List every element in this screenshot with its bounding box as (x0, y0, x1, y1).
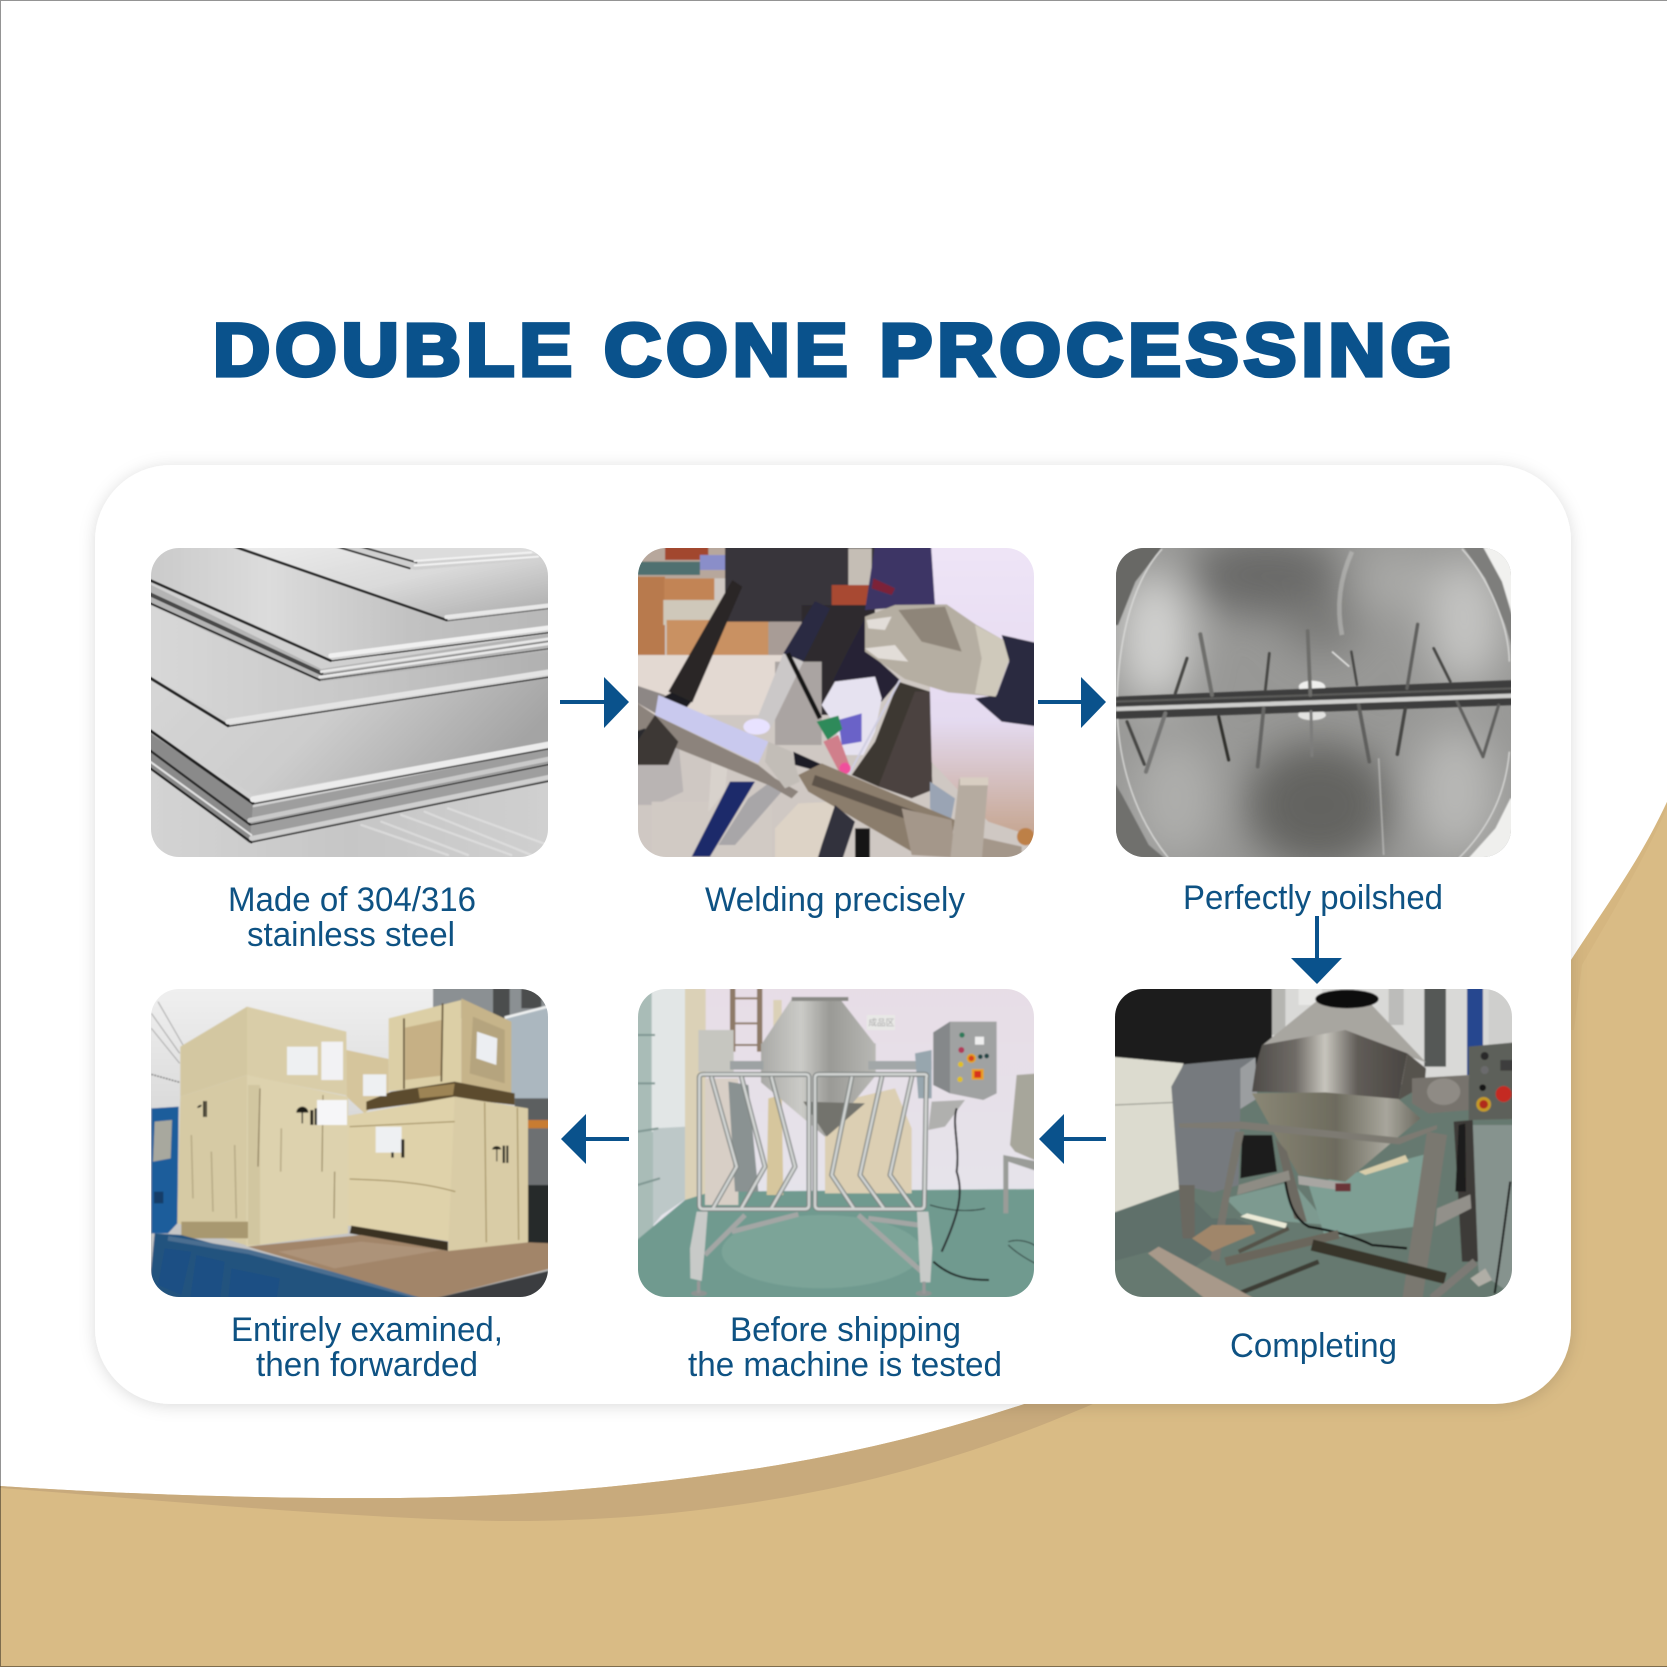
caption: tested: Before shipping (730, 1311, 961, 1349)
arrow: step 3 to 4 (1291, 916, 1342, 984)
decorative tan wave background (0, 802, 1667, 1667)
photo: crates on truck (148, 985, 551, 1302)
arrow: step 5 to 6 (561, 1114, 629, 1164)
title: DOUBLE CONE PROCESSING (213, 310, 1452, 392)
caption: tested: the machine is tested (688, 1346, 1002, 1384)
photo: stainless steel sheets (148, 545, 551, 862)
caption: polished: Perfectly poilshed (1183, 879, 1443, 917)
arrow: step 2 to 3 (1038, 677, 1106, 728)
photo: machine test: 成品区 (868, 1017, 895, 1028)
arrow: step 1 to 2 (560, 677, 629, 728)
caption: welding: Welding precisely (705, 881, 965, 919)
panel: process card (95, 465, 1571, 1404)
caption: completing: Completing (1230, 1327, 1397, 1365)
photo: welding (635, 545, 1038, 862)
caption: examined: then forwarded (256, 1346, 478, 1384)
caption: examined: Entirely examined, (231, 1311, 503, 1349)
photo: polished drum interior (1112, 535, 1515, 868)
caption: stainless steel: Made of 304/316 (228, 881, 476, 919)
photo: machine test (635, 985, 1038, 1302)
caption: tested (688, 1311, 1002, 1384)
photo: completed machine (1112, 985, 1515, 1302)
caption: stainless steel: stainless steel (247, 916, 455, 954)
caption: stainless steel (228, 881, 476, 954)
arrow: step 4 to 5 (1039, 1114, 1106, 1164)
caption: examined (231, 1311, 503, 1384)
